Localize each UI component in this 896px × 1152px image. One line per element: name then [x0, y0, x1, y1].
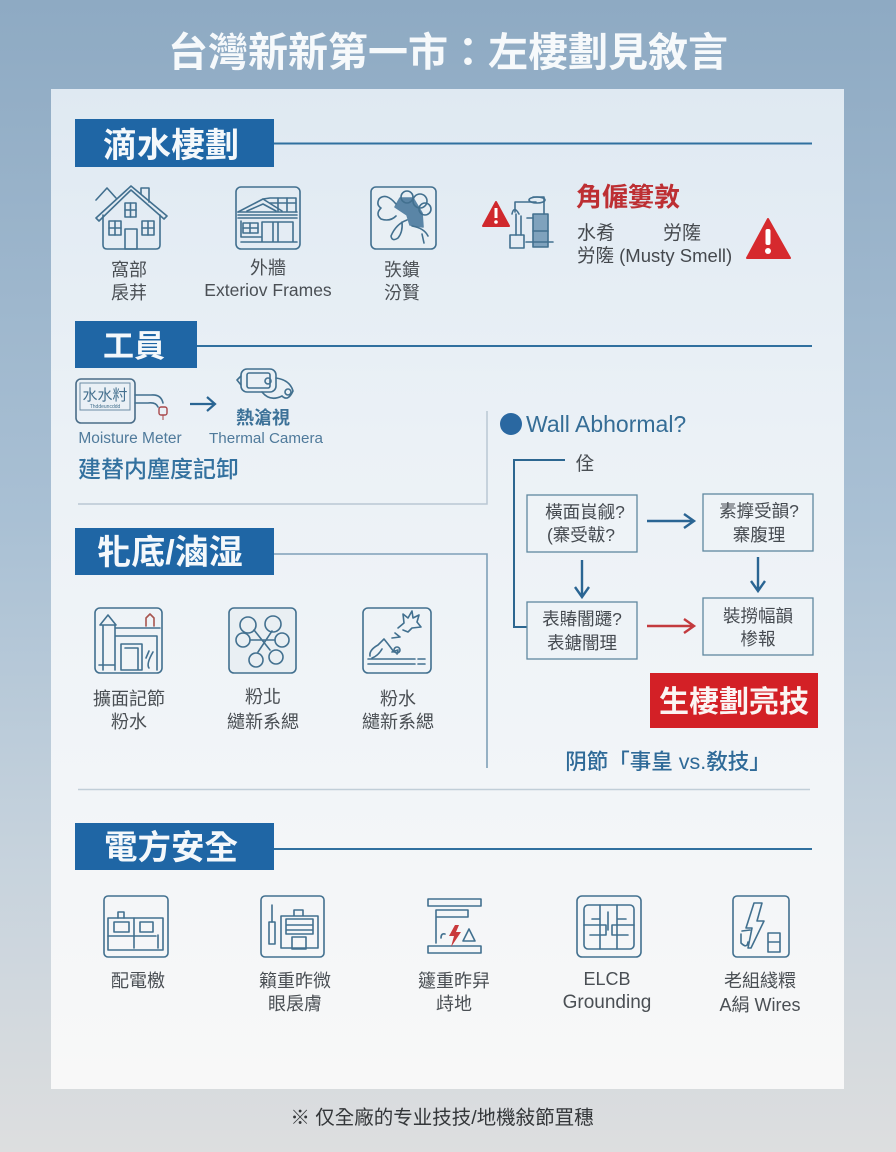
icon: warning triangle small — [483, 202, 509, 226]
warning text: 労隓 — [663, 222, 701, 244]
heading: water leak: 滴水棲劃 — [103, 127, 239, 165]
bracket connector — [514, 460, 565, 627]
flow box 4 — [703, 598, 813, 655]
label: grounding — [418, 971, 490, 1014]
label: breaker: 籟重昨微 — [259, 971, 331, 991]
flow box 3: 表鎕闇理 — [547, 633, 617, 653]
heading: humidity — [75, 528, 274, 575]
label: mold system B: 繾新系緦 — [362, 712, 434, 732]
icon: lightning frame — [428, 899, 481, 953]
heading: humidity: 牝底/滷湿 — [97, 534, 243, 572]
label: mold: 矤鐀 — [384, 260, 420, 280]
flow box 2: 素擵受韻? — [719, 501, 799, 521]
icon: moisture meter: Thddeuncddd — [90, 404, 121, 410]
icon: warning triangle large — [747, 219, 790, 258]
label: wall: 粉水 — [111, 712, 147, 732]
footer note: ※ 仅全廠的专业技技/地機敍節罝穗 — [290, 1106, 594, 1129]
icon: moisture meter: 水水籿 — [82, 387, 128, 404]
label: old wires: A絹 Wires — [720, 995, 800, 1015]
label: grounding: 籧重昨舁 — [418, 971, 490, 991]
label: ELCB: ELCB — [583, 969, 631, 989]
label: mold system A: 繾新系緦 — [227, 712, 299, 732]
icon: moisture meter — [76, 379, 167, 423]
heading: electrical safety — [75, 823, 274, 870]
label: distribution box: 配電檄 — [111, 971, 165, 991]
main panel — [51, 89, 844, 1089]
flow box 3: 表賰闇躚? — [542, 609, 622, 629]
red callout — [650, 673, 818, 728]
heading: tools — [75, 321, 197, 368]
icon: ELCB — [577, 896, 641, 957]
label: breaker — [259, 971, 331, 1014]
icon: panel box — [104, 896, 168, 957]
heading: water leak — [75, 119, 274, 167]
icon: thermal camera — [237, 369, 293, 398]
flow box 1 — [527, 495, 637, 552]
tools note: 建替内塵度記卸 — [78, 456, 239, 482]
icon: house — [96, 186, 167, 249]
panel: water leak section — [75, 119, 812, 303]
arrow: meter to camera — [190, 397, 215, 411]
label: exterior frames: 外牆 — [250, 258, 286, 278]
icon: exterior frames — [236, 187, 300, 249]
warning heading: 角僱簍敦 — [576, 182, 680, 212]
icon: mold A — [229, 608, 296, 673]
label: exterior frames: Exteriov Frames — [204, 280, 332, 300]
label: mold system B: 粉水 — [380, 689, 416, 709]
label: mold system B — [362, 689, 434, 732]
icon: water pipes — [510, 197, 553, 248]
flow box 2: 寨腹理 — [733, 525, 785, 545]
flow box 4: 椮報 — [740, 629, 776, 649]
panel: flowchart — [500, 411, 818, 774]
icon: wall surface — [95, 608, 162, 673]
label: thermal camera: Thermal Camera — [209, 430, 324, 447]
label: breaker: 眼扆膚 — [268, 994, 322, 1014]
arrow: box3 to box4 red — [647, 619, 694, 633]
label: ELCB — [563, 969, 651, 1013]
flow note: 佺 — [575, 453, 595, 475]
label: roof: 扆荓 — [111, 283, 147, 303]
icon: old wires — [733, 896, 789, 957]
flow box 4: 裝撈幅韻 — [723, 606, 793, 626]
label: roof: 窩部 — [111, 260, 147, 280]
arrow: box1 to box3 — [575, 560, 589, 597]
label: ELCB: Grounding — [563, 992, 651, 1013]
label: thermal camera: 熱滄視 — [236, 407, 290, 428]
icon: mold stain — [371, 187, 436, 249]
label: mold: 汾贀 — [384, 283, 420, 303]
panel: humidity section — [75, 528, 487, 768]
warning text: 労隓 (Musty Smell) — [577, 245, 732, 266]
panel: tools section — [75, 321, 812, 482]
flow box 1: (寨受韍? — [547, 525, 615, 545]
label: roof — [111, 260, 147, 303]
flow box 1: 橫面峎觎? — [545, 502, 625, 522]
label: wall — [93, 689, 165, 732]
arrow: box1 to box2 — [647, 514, 694, 528]
label: mold system A: 粉北 — [245, 687, 281, 707]
heading: electrical safety: 電方安全 — [104, 830, 238, 867]
flow start: Wall Abhormal? — [526, 411, 686, 437]
label: mold system A — [227, 687, 299, 732]
label: grounding: 歭地 — [436, 994, 472, 1014]
red callout: 生棲劃亮技 — [659, 686, 809, 719]
title: 台灣新新第一市：左棲劃見敘言 — [168, 31, 728, 75]
label: old wires — [720, 971, 800, 1015]
label: exterior frames — [204, 258, 332, 300]
warning text — [577, 222, 732, 266]
icon: breaker — [261, 896, 324, 957]
callout caption: 阴節「事皇 vs.敎技」 — [565, 750, 771, 774]
arrow: box2 to box4 — [751, 557, 765, 591]
flow box 2 — [703, 494, 813, 551]
flow box 3 — [527, 602, 637, 659]
warning text: 水肴 — [577, 222, 615, 244]
panel: electrical safety section — [75, 823, 812, 1015]
label: thermal camera — [209, 407, 324, 447]
label: wall: 擴面記節 — [93, 689, 165, 709]
label: moisture meter: Moisture Meter — [78, 430, 182, 447]
label: mold — [384, 260, 420, 303]
heading: tools: 工員 — [103, 329, 165, 364]
label: old wires: 老組綫糫 — [724, 971, 796, 991]
icon: water spray — [363, 608, 431, 673]
